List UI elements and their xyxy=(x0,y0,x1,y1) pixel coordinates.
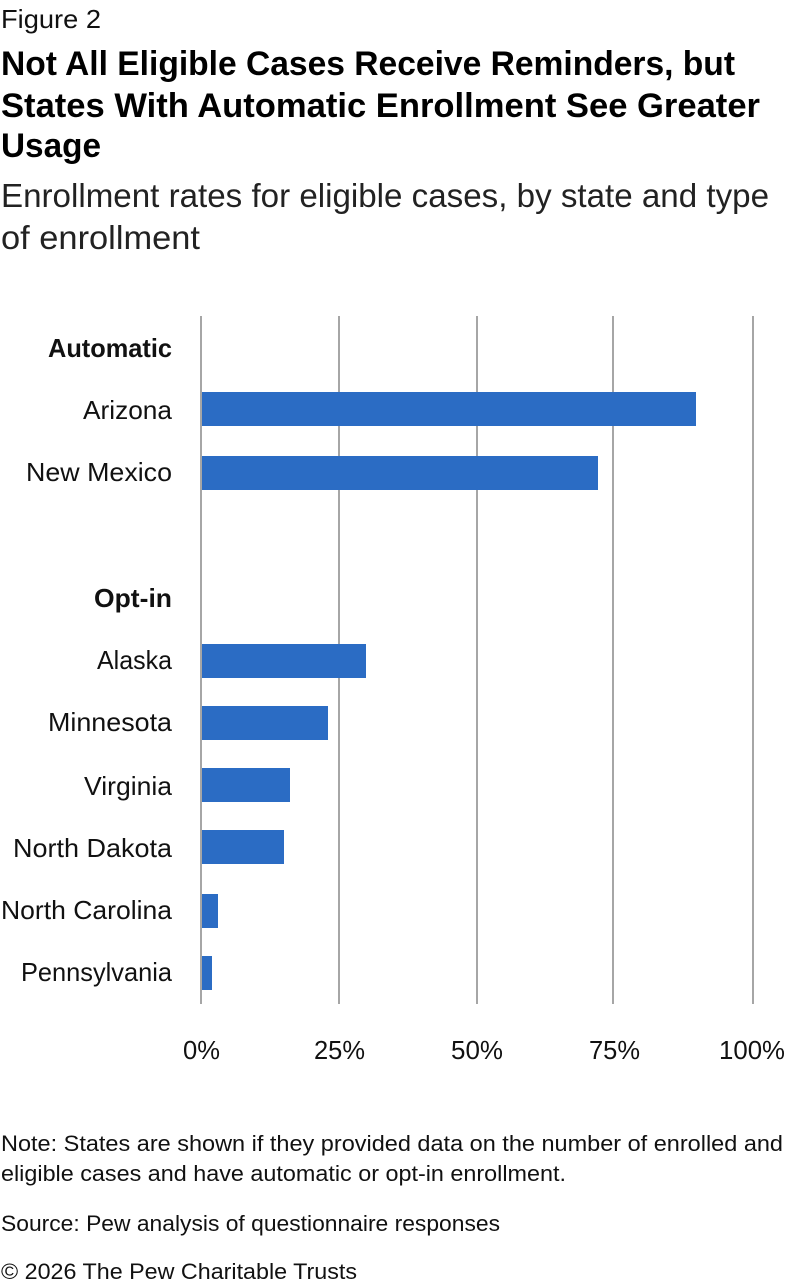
title: States With Automatic Enrollment See Greater xyxy=(1,87,760,125)
axis labels: 50% xyxy=(451,1035,503,1065)
category labels: Opt-in xyxy=(94,583,172,613)
category labels: New Mexico xyxy=(26,457,172,487)
subtitle xyxy=(1,177,769,256)
category labels: Automatic xyxy=(48,333,172,363)
axis labels xyxy=(183,1035,785,1065)
axis labels: 75% xyxy=(589,1035,640,1065)
title: Not All Eligible Cases Receive Reminders, but xyxy=(1,45,735,83)
bars xyxy=(202,392,696,990)
category labels xyxy=(1,333,173,987)
category labels: Pennsylvania xyxy=(21,957,173,987)
category labels: Minnesota xyxy=(48,707,173,737)
axis labels: 0% xyxy=(183,1035,220,1065)
subtitle: Enrollment rates for eligible cases, by state and type xyxy=(1,177,769,214)
note: Note: States are shown if they provided data on the number of enrolled and xyxy=(1,1131,783,1156)
title: Usage xyxy=(1,127,101,165)
note: eligible cases and have automatic or opt-in enrollment. xyxy=(1,1161,566,1186)
axis labels: 100% xyxy=(719,1035,785,1065)
category labels: Virginia xyxy=(84,771,173,801)
source: Source: Pew analysis of questionnaire responses xyxy=(1,1211,500,1236)
category labels: North Carolina xyxy=(1,895,173,925)
category labels: Alaska xyxy=(97,645,173,675)
subtitle: of enrollment xyxy=(1,219,200,256)
bar chart xyxy=(1,316,785,1065)
title xyxy=(1,45,760,165)
category labels: North Dakota xyxy=(13,833,173,863)
note xyxy=(1,1131,783,1186)
figure label: Figure 2 xyxy=(1,4,101,34)
copyright: © 2026 The Pew Charitable Trusts xyxy=(1,1259,357,1284)
axis labels: 25% xyxy=(314,1035,365,1065)
category labels: Arizona xyxy=(83,395,173,425)
